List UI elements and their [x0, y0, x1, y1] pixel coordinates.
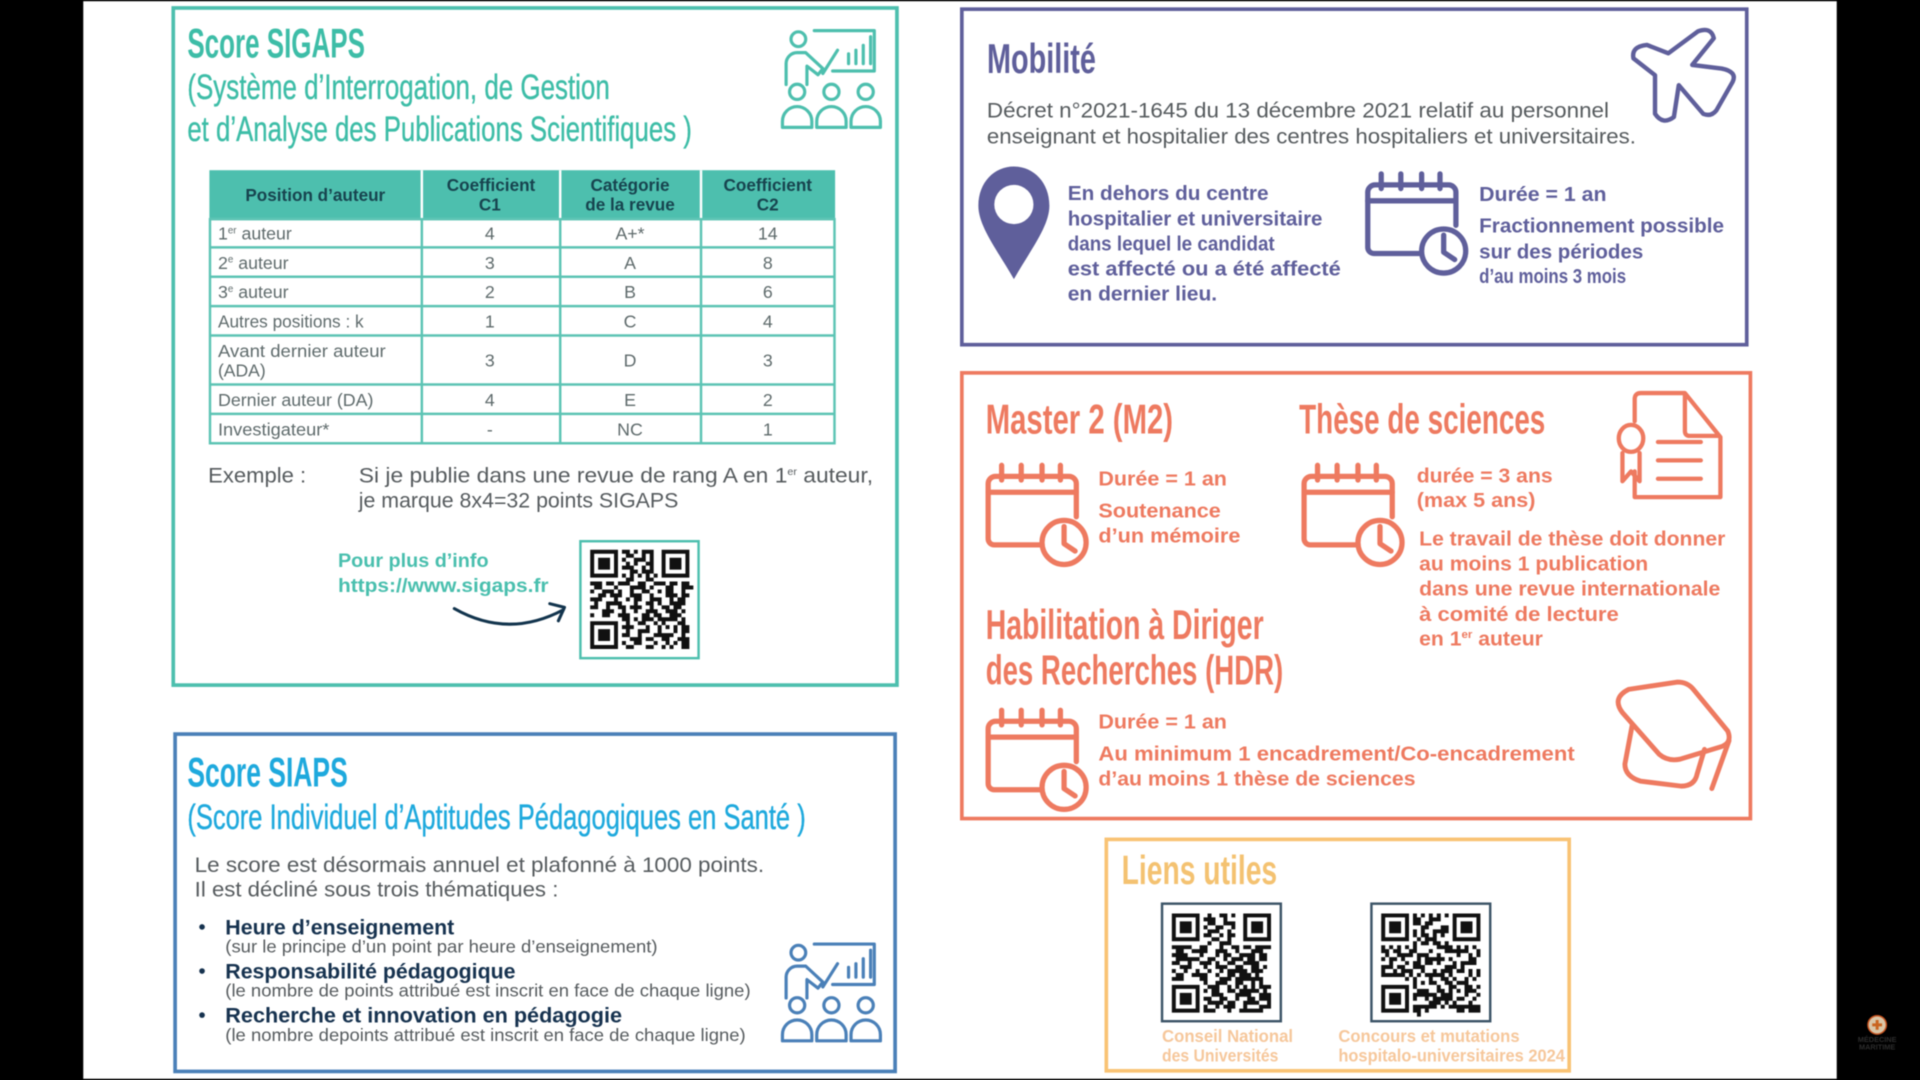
- text block: more info link: [338, 550, 549, 597]
- text block: example: [208, 464, 873, 513]
- table header: de la revue: [585, 195, 675, 215]
- panel: Score SIAPS: [175, 734, 895, 1071]
- logo: watermark: MARITIME: [1859, 1042, 1895, 1051]
- logo: watermark: [1858, 1016, 1897, 1051]
- text block: outside hospital: [1068, 183, 1341, 306]
- table rows: Investigateur*: [218, 419, 329, 439]
- text block: more info link: Pour plus d’info: [338, 550, 489, 572]
- table rows: 1: [485, 312, 495, 332]
- text block: outside hospital: dans lequel le candidat: [1068, 233, 1275, 255]
- table rows: B: [624, 282, 636, 302]
- table rows: 14: [758, 223, 778, 243]
- table rows: e: [228, 255, 233, 266]
- table rows: auteur: [233, 282, 289, 302]
- table rows: (ADA): [218, 361, 266, 381]
- icon: calendar and clock purple: [1368, 174, 1466, 273]
- icon: teacher and audience: [782, 31, 880, 127]
- heading: Score SIGAPS: (Système d’Interrogation, de Gestion: [187, 67, 610, 107]
- icon: plane: [1633, 30, 1734, 121]
- text block: duration: Fractionnement possible: [1479, 216, 1724, 238]
- table header: Coefficient: [724, 175, 812, 195]
- QR code: Concours et mutations: [1371, 904, 1490, 1021]
- text block: outside hospital: hospitalier et universitaire: [1068, 208, 1322, 230]
- captions: QR links: Conseil National: [1162, 1026, 1293, 1046]
- table rows: 4: [485, 223, 495, 243]
- text block: thèse details: [1417, 465, 1725, 650]
- text block: thèse details: (max 5 ans): [1417, 490, 1536, 512]
- table rows: 4: [485, 390, 495, 410]
- text block: outside hospital: en dernier lieu.: [1068, 284, 1217, 306]
- text block: master details: [1098, 469, 1240, 547]
- table rows: E: [624, 390, 636, 410]
- table header: C1: [479, 195, 501, 215]
- captions: QR links: [1162, 1026, 1565, 1066]
- table rows: Avant dernier auteur: [218, 341, 386, 361]
- text block: thèse details: au moins 1 publication: [1419, 554, 1648, 576]
- table rows: e: [228, 284, 233, 295]
- QR code: sigaps.fr: [580, 541, 699, 658]
- list: three themes: [199, 916, 751, 1045]
- text block: duration: [1479, 184, 1724, 288]
- table: author position and journal coefficients: [209, 170, 835, 443]
- heading: HDR: Habilitation à Diriger: [986, 601, 1264, 648]
- text block: decree: enseignant et hospitalier des centres hospitaliers et universitaires.: [987, 125, 1636, 148]
- table header: Catégorie: [591, 175, 669, 195]
- text block: outside hospital: En dehors du centre: [1068, 183, 1269, 205]
- panel: Mobilité: [962, 9, 1747, 345]
- text block: HDR details: d’au moins 1 thèse de sciences: [1098, 769, 1416, 791]
- text block: example: je marque 8x4=32 points SIGAPS: [358, 490, 678, 513]
- table rows: A+*: [615, 223, 645, 243]
- table rows: 6: [763, 282, 773, 302]
- text block: HDR details: Durée = 1 an: [1098, 712, 1227, 734]
- table rows: auteur: [237, 223, 292, 243]
- table rows: 4: [763, 312, 773, 332]
- text block: annual score intro: Il est décliné sous trois thématiques :: [195, 878, 558, 901]
- heading: Score SIAPS: (Score Individuel d’Aptitudes Pédagogiques en Santé ): [187, 797, 806, 837]
- table rows: 3: [485, 253, 495, 273]
- table rows: NC: [617, 419, 643, 439]
- text block: example: Si je publie dans une revue de rang A en 1: [359, 464, 750, 487]
- text block: HDR details: [1098, 712, 1575, 791]
- text block: duration: Durée = 1 an: [1479, 184, 1607, 206]
- panel: Score SIGAPS: [173, 8, 897, 685]
- list: three themes: Responsabilité pédagogique: [225, 960, 516, 983]
- text block: HDR details: Au minimum 1 encadrement/Co-encadrement: [1098, 743, 1575, 765]
- heading: Master 2: Master 2 (M2): [986, 395, 1173, 442]
- table rows: C: [624, 312, 637, 332]
- icon: calendar master: [988, 465, 1086, 564]
- heading: Score SIGAPS: et d’Analyse des Publications Scientifiques ): [187, 109, 692, 149]
- table rows: 1: [763, 419, 773, 439]
- text block: thèse details: auteur: [1472, 628, 1543, 650]
- icon: calendar HDR: [988, 710, 1086, 809]
- table rows: 2: [485, 282, 495, 302]
- table rows: auteur: [233, 253, 289, 273]
- list: three themes: Heure d’enseignement: [225, 916, 454, 939]
- arrow: towards QR code: [454, 604, 564, 624]
- heading: Thèse de sciences: Thèse de sciences: [1299, 395, 1545, 442]
- panel: Liens utiles: [1106, 839, 1569, 1071]
- text block: thèse details: à comité de lecture: [1419, 604, 1619, 626]
- table rows: [218, 223, 778, 439]
- table rows: A: [624, 253, 636, 273]
- text block: master details: Soutenance: [1098, 500, 1221, 522]
- heading: Score SIAPS: Score SIAPS: [187, 749, 348, 796]
- captions: QR links: hospitalo-universitaires 2024: [1338, 1046, 1565, 1066]
- text block: thèse details: en 1: [1419, 628, 1460, 650]
- list: three themes: (sur le principe d’un point par heure d’enseignement): [225, 937, 658, 957]
- table rows: 2: [218, 253, 228, 273]
- text block: thèse details: er: [1461, 629, 1473, 641]
- QR code: Conseil National des Universités: [1162, 904, 1281, 1021]
- heading: HDR: [986, 601, 1283, 693]
- table rows: 3: [218, 282, 228, 302]
- text block: thèse details: durée = 3 ans: [1417, 465, 1553, 487]
- heading: Liens utiles: Liens utiles: [1122, 847, 1277, 893]
- text block: decree: [987, 100, 1636, 148]
- table header: [245, 175, 812, 215]
- text block: example: er: [787, 467, 798, 478]
- table rows: 1: [218, 223, 228, 243]
- text block: master details: d’un mémoire: [1098, 525, 1240, 547]
- table rows: -: [487, 419, 493, 439]
- heading: HDR: des Recherches (HDR): [986, 646, 1283, 693]
- text block: thèse details: dans une revue internationale: [1419, 579, 1720, 601]
- list: three themes: (le nombre depoints attribué est inscrit en face de chaque ligne): [225, 1025, 746, 1045]
- table rows: 3: [763, 351, 773, 371]
- table rows: 3: [485, 351, 495, 371]
- text block: master details: Durée = 1 an: [1098, 469, 1227, 491]
- captions: QR links: des Universités: [1162, 1046, 1278, 1066]
- table header: C2: [757, 195, 779, 215]
- table header: Position d’auteur: [245, 185, 386, 205]
- heading: Mobilité: Mobilité: [987, 35, 1096, 82]
- text block: duration: d’au moins 3 mois: [1479, 266, 1626, 288]
- icon: location pin: [978, 167, 1049, 279]
- panel: Master, thèse and HDR: [962, 373, 1750, 819]
- table header: Coefficient: [447, 175, 536, 195]
- icon: calendar thèse: [1304, 465, 1402, 564]
- text block: example: auteur,: [797, 464, 873, 487]
- table rows: D: [624, 351, 636, 371]
- table rows: er: [228, 225, 237, 236]
- heading: Score SIGAPS: Score SIGAPS: [187, 20, 365, 67]
- text block: outside hospital: est affecté ou a été affecté: [1068, 259, 1341, 281]
- text block: annual score intro: Le score est désormais annuel et plafonné à 1000 points.: [195, 854, 764, 877]
- list: three themes: (le nombre de points attribué est inscrit en face de chaque ligne): [225, 981, 751, 1001]
- list: three themes: Recherche et innovation en pédagogie: [225, 1004, 622, 1027]
- table rows: Dernier auteur (DA): [218, 390, 373, 410]
- logo: watermark: MÉDECINE: [1858, 1035, 1897, 1044]
- icon: teacher and audience blue: [782, 944, 880, 1041]
- text block: thèse details: Le travail de thèse doit donner: [1419, 529, 1725, 551]
- text block: example: Exemple :: [208, 464, 306, 487]
- icon: graduation cap: [1618, 682, 1729, 789]
- text block: duration: sur des périodes: [1479, 241, 1643, 263]
- text block: decree: Décret n°2021-1645 du 13 décembre 2021 relatif au personnel: [987, 100, 1609, 123]
- text block: more info link: https://www.sigaps.fr: [338, 575, 549, 597]
- heading: Score SIGAPS: [187, 20, 692, 149]
- captions: QR links: Concours et mutations: [1338, 1026, 1520, 1046]
- text block: annual score intro: [195, 854, 764, 901]
- table rows: Autres positions : k: [218, 312, 364, 332]
- table rows: 2: [763, 390, 773, 410]
- table rows: 8: [763, 253, 773, 273]
- heading: Score SIAPS: [187, 749, 806, 837]
- icon: certificate: [1619, 393, 1720, 497]
